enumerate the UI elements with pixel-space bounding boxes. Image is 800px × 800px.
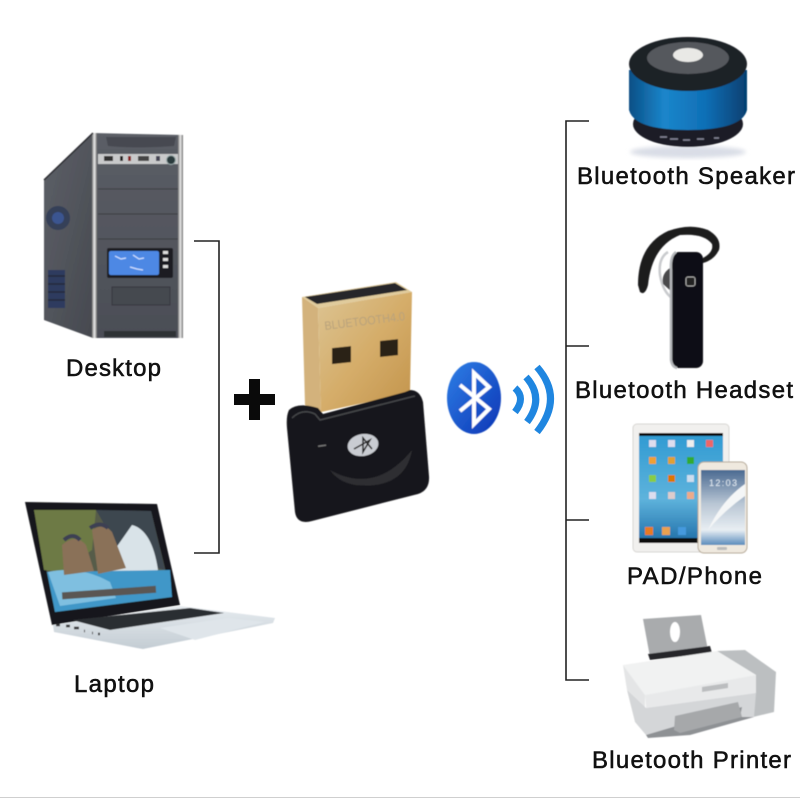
- icon: printer: [623, 615, 776, 738]
- icon: Bluetooth headset: [638, 227, 720, 368]
- tablet: [633, 424, 729, 552]
- icon: wireless signal waves: [515, 367, 550, 432]
- left bracket connector: [194, 241, 219, 553]
- USB connector: BLUETOOTH4.0: [324, 309, 406, 333]
- label: Bluetooth Speaker: Bluetooth Speaker: [577, 163, 795, 190]
- label: PAD/Phone: PAD/Phone: [627, 563, 762, 590]
- label: Bluetooth Headset: Bluetooth Headset: [575, 377, 793, 404]
- dongle body: [287, 390, 429, 522]
- icon: laptop: [25, 502, 275, 649]
- bottom edge line: [0, 797, 800, 798]
- icon: USB Bluetooth dongle: [287, 282, 429, 522]
- phone: 12:03: [709, 478, 737, 488]
- plus sign: [234, 379, 275, 420]
- icon: Bluetooth speaker: [629, 37, 747, 158]
- right bracket connector: [566, 121, 589, 680]
- icon: tablet and phone: [633, 424, 747, 553]
- label: Desktop: Desktop: [66, 355, 161, 382]
- label: Bluetooth Printer: Bluetooth Printer: [592, 747, 791, 774]
- icon: desktop tower computer: [44, 133, 183, 338]
- icon: Bluetooth logo: [447, 362, 501, 434]
- label: Laptop: Laptop: [74, 671, 154, 698]
- USB connector: [302, 282, 412, 412]
